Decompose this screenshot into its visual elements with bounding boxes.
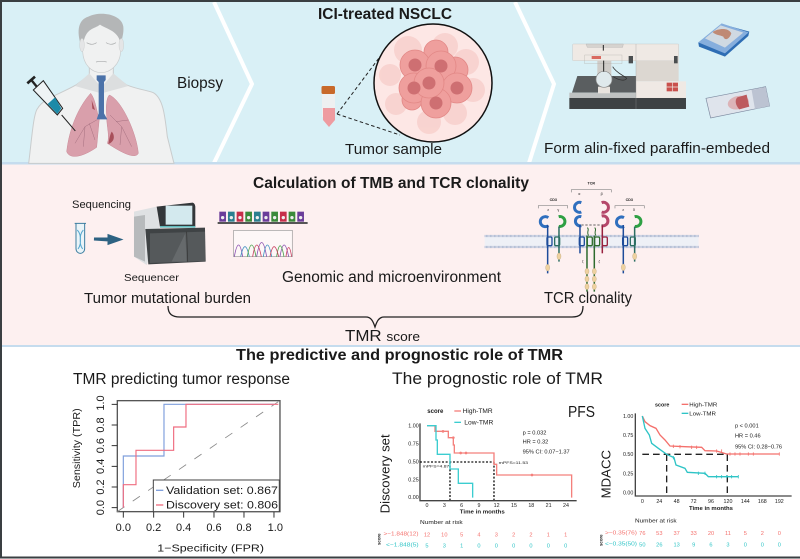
- risk table: 0: [547, 543, 550, 549]
- chart: MDACC Kaplan-Meier: Number at risk: [635, 518, 677, 524]
- legend: score: [427, 409, 444, 415]
- chart: discovery set PFS Kaplan-Meier: 0.00: [408, 495, 419, 501]
- risk table: 26: [656, 543, 662, 549]
- chart: discovery set PFS Kaplan-Meier: 18: [528, 503, 534, 509]
- chart: MDACC Kaplan-Meier: 72: [691, 499, 697, 505]
- risk table: 0: [477, 543, 481, 549]
- risk table: 0: [564, 543, 567, 549]
- legend: Low-TMR: [689, 411, 716, 417]
- risk table: 0: [529, 543, 533, 549]
- chart: discovery set PFS Kaplan-Meier: 6: [460, 503, 463, 509]
- chart: MDACC Kaplan-Meier: 1.00: [623, 414, 633, 420]
- risk table: 2: [512, 533, 515, 539]
- risk table: 0: [512, 543, 515, 549]
- icon: paraffin block: [698, 23, 749, 57]
- chart: ROC curve: 0.0: [95, 500, 107, 515]
- legend: Validation set: 0.867: [166, 485, 278, 497]
- risk table: 11: [725, 531, 731, 537]
- chart: MDACC Kaplan-Meier: HR = 0.46: [735, 434, 761, 440]
- chart: discovery set PFS Kaplan-Meier: Time in months: [460, 509, 505, 515]
- risk table: 0: [778, 543, 781, 549]
- icon: TCR complex on membrane: [485, 181, 699, 292]
- risk table: 1: [547, 533, 550, 539]
- risk table: 2: [529, 533, 533, 539]
- chart: ROC curve: 0.6: [95, 438, 107, 453]
- icon: TCR complex on membrane: δ: [633, 208, 635, 212]
- chart: ROC curve: 0.8: [236, 522, 252, 534]
- icon: sequencer: [134, 203, 206, 265]
- chart: discovery set PFS Kaplan-Meier: score: [376, 533, 381, 545]
- chart: MDACC Kaplan-Meier: 0: [641, 499, 644, 505]
- text: PFS: PFS: [568, 404, 595, 421]
- chart: MDACC Kaplan-Meier: 48: [674, 499, 680, 505]
- legend: [655, 402, 717, 417]
- chart: MDACC Kaplan-Meier: 192: [775, 499, 784, 505]
- icon: TCR complex on membrane: γ: [557, 208, 559, 212]
- text: Sequencing: Sequencing: [72, 199, 131, 211]
- chart: discovery set PFS Kaplan-Meier: HR = 0.32: [523, 440, 548, 446]
- risk table: 3: [495, 533, 498, 539]
- risk table: 5: [425, 543, 429, 549]
- risk table: <−1.848(5): [386, 543, 419, 549]
- risk table: 10: [441, 533, 447, 539]
- risk table: 20: [708, 531, 714, 537]
- icon: patient with lungs: [29, 14, 174, 163]
- chart: MDACC Kaplan-Meier: 0.00: [623, 490, 633, 496]
- icon: chromatogram: [234, 230, 292, 257]
- icon: DNA test tube: [75, 223, 86, 253]
- legend: score: [655, 402, 669, 408]
- chart: discovery set PFS Kaplan-Meier: mPFS=4.87: [423, 464, 449, 468]
- chart: ROC curve: [72, 395, 283, 555]
- icon: TCR complex on membrane: CD3: [626, 198, 633, 202]
- icon: DNA base pairs: [218, 212, 308, 224]
- chart: ROC curve: 1−Specificity (FPR): [157, 544, 264, 555]
- membrane: [485, 235, 699, 248]
- chart: discovery set PFS Kaplan-Meier: 0.50: [408, 460, 419, 466]
- risk table: 13: [674, 543, 680, 549]
- chart: discovery set PFS Kaplan-Meier: 95% CI: 0.07−1.37: [523, 450, 570, 456]
- text: TMR score: TMR score: [345, 328, 420, 345]
- risk table: 50: [639, 543, 645, 549]
- risk table: 9: [692, 543, 695, 549]
- risk table: 2: [761, 531, 764, 537]
- icon: TCR complex on membrane: ε: [622, 208, 624, 212]
- panel: calculation of TMB and TCR clonality: [0, 164, 800, 347]
- risk table: 3: [726, 543, 730, 549]
- chart: MDACC Kaplan-Meier: 0.50: [623, 452, 633, 458]
- text: Tumor sample: Tumor sample: [345, 141, 442, 158]
- risk table: 6: [709, 543, 713, 549]
- chart: ROC curve: 0.4: [95, 459, 107, 474]
- text: Tumor mutational burden: Tumor mutational burden: [84, 290, 251, 307]
- chart: MDACC Kaplan-Meier: 95% CI: 0.28−0.76: [735, 444, 782, 450]
- icon: TCR complex on membrane: α: [578, 192, 581, 196]
- legend: [427, 409, 494, 426]
- chart: discovery set PFS Kaplan-Meier: 21: [546, 503, 552, 509]
- risk table: 76: [639, 531, 645, 537]
- legend: Discovery set: 0.806: [166, 500, 278, 512]
- legend: Low-TMR: [464, 420, 494, 426]
- heading: Calculation of TMB and TCR clonality: Calculation of TMB and TCR clonality: [253, 175, 529, 192]
- risk table: [383, 531, 567, 549]
- chart: MDACC Kaplan-Meier: 144: [741, 499, 750, 505]
- risk table: <−0.35(50): [605, 541, 637, 547]
- text: The prognostic role of TMR: The prognostic role of TMR: [392, 369, 603, 388]
- chart: MDACC Kaplan-Meier: MDACC: [599, 450, 614, 498]
- chart: MDACC Kaplan-Meier: 96: [708, 499, 714, 505]
- chart: ROC curve: 0.8: [95, 417, 107, 433]
- icon: TCR complex on membrane: ζ: [599, 260, 601, 264]
- chart: discovery set PFS Kaplan-Meier: 12: [494, 503, 500, 509]
- text: Form alin-fixed paraffin-embeded: Form alin-fixed paraffin-embeded: [544, 140, 770, 157]
- risk table: 0: [744, 543, 747, 549]
- chart: ROC curve: 0.2: [95, 479, 107, 495]
- icon: lungs: [67, 75, 138, 156]
- icon: sample tube: [322, 86, 335, 127]
- risk table: 0: [778, 531, 781, 537]
- risk table: 1: [460, 543, 463, 549]
- chart: MDACC Kaplan-Meier: [599, 402, 792, 549]
- risk table: 0: [495, 543, 498, 549]
- icon: syringe: [27, 77, 75, 131]
- icon: TCR complex on membrane: ε: [547, 208, 549, 212]
- arrow: tube to sequencer: [94, 236, 119, 243]
- panel: ICI-treated NSCLC workflow: [0, 0, 800, 164]
- icon: TCR complex on membrane: β: [601, 192, 603, 196]
- risk table: >−0.35(76): [605, 531, 637, 537]
- risk table: [605, 531, 781, 549]
- text: Sequencer: Sequencer: [124, 272, 180, 284]
- chart: discovery set PFS Kaplan-Meier: Number at risk: [420, 520, 463, 526]
- icon: microtome machine: [569, 44, 686, 109]
- text: Genomic and microenvironment: Genomic and microenvironment: [282, 269, 502, 286]
- chart: discovery set PFS Kaplan-Meier: 15: [511, 503, 517, 509]
- chart: MDACC Kaplan-Meier: 168: [758, 499, 767, 505]
- chart: discovery set PFS Kaplan-Meier: 0: [426, 503, 429, 509]
- icon: dashed zoom lines: [337, 58, 400, 135]
- chart: ROC curve: 1.0: [95, 395, 107, 411]
- chart: discovery set PFS Kaplan-Meier: 0.75: [408, 442, 419, 448]
- chart: MDACC Kaplan-Meier: p < 0.001: [735, 423, 759, 429]
- icon: tumor cell cluster: [374, 24, 492, 142]
- chart: ROC curve: 1.0: [268, 522, 283, 534]
- risk table: 5: [460, 533, 463, 539]
- chart: discovery set PFS Kaplan-Meier: 24: [563, 503, 569, 509]
- text: TCR clonality: TCR clonality: [544, 290, 632, 307]
- heading: ICI-treated NSCLC: ICI-treated NSCLC: [318, 6, 452, 23]
- chart: ROC curve: 0.6: [206, 522, 222, 534]
- risk table: 33: [691, 531, 697, 537]
- risk table: 37: [674, 531, 680, 537]
- chart: discovery set PFS Kaplan-Meier: p = 0.032: [523, 430, 546, 436]
- risk table: 12: [424, 533, 430, 539]
- chart: discovery set PFS Kaplan-Meier: 0.25: [408, 478, 419, 484]
- risk table: 5: [744, 531, 747, 537]
- icon: TCR complex on membrane: TCR: [588, 181, 595, 185]
- chart: discovery set PFS Kaplan-Meier: 1.00: [408, 424, 419, 430]
- risk table: 1: [564, 533, 567, 539]
- chart: MDACC Kaplan-Meier: 0.75: [623, 433, 633, 439]
- chart: ROC curve: 0.4: [176, 522, 191, 534]
- panel: predictive and prognostic role of TMR: [72, 347, 792, 555]
- legend: High-TMR: [463, 409, 493, 415]
- icon: tissue slide: [706, 87, 770, 118]
- chart: MDACC Kaplan-Meier: 120: [724, 499, 732, 505]
- risk table: 3: [443, 543, 446, 549]
- icon: curly bracket: [168, 306, 583, 327]
- text: Biopsy: Biopsy: [177, 75, 223, 92]
- legend: [153, 480, 279, 512]
- chart: MDACC Kaplan-Meier: 0.25: [623, 471, 633, 477]
- chart: discovery set PFS Kaplan-Meier: 3: [443, 503, 446, 509]
- chart: discovery set PFS Kaplan-Meier: 9: [478, 503, 481, 509]
- chart: discovery set PFS Kaplan-Meier: [376, 409, 577, 549]
- text: TMR predicting tumor response: TMR predicting tumor response: [73, 371, 290, 388]
- chart: ROC curve: Sensitivity (TPR): [72, 408, 83, 488]
- heading: The predictive and prognostic role of TMR: The predictive and prognostic role of TMR: [236, 347, 563, 364]
- risk table: 4: [477, 533, 481, 539]
- chart: ROC curve: 0.0: [116, 522, 131, 534]
- icon: TCR complex on membrane: ζ: [582, 260, 584, 264]
- risk table: 0: [761, 543, 764, 549]
- chart: discovery set PFS Kaplan-Meier: mPFS=11.53: [499, 461, 528, 465]
- chart: discovery set PFS Kaplan-Meier: Discovery set: [377, 434, 392, 513]
- chart: MDACC Kaplan-Meier: 24: [656, 499, 662, 505]
- legend: High-TMR: [689, 402, 717, 408]
- risk table: 53: [656, 531, 662, 537]
- chart: MDACC Kaplan-Meier: score: [599, 534, 604, 546]
- chart: ROC curve: 0.2: [146, 522, 161, 534]
- icon: TCR complex on membrane: CD3: [550, 198, 557, 202]
- chart: MDACC Kaplan-Meier: Time in months: [689, 506, 733, 512]
- risk table: >−1.848(12): [383, 531, 419, 537]
